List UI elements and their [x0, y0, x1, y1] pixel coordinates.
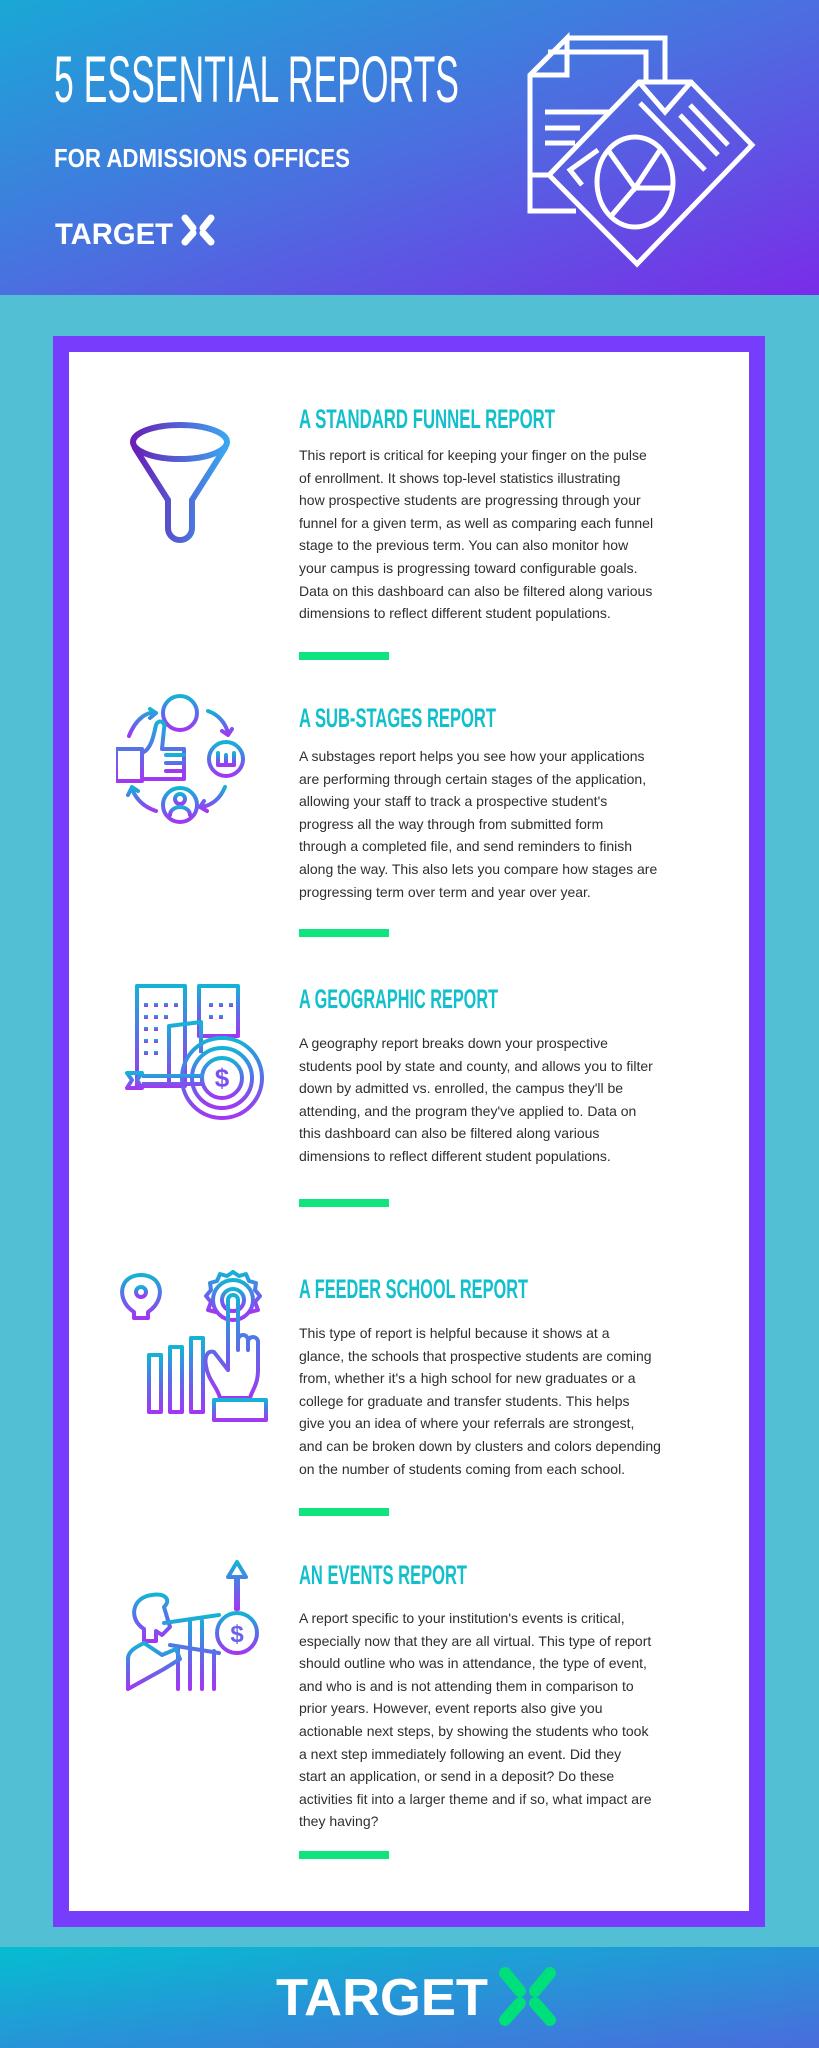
icon: reports documents [528, 32, 756, 268]
icon: bulb, chart, gear and hand [120, 1270, 268, 1422]
text: events: and who is and is not attending them in comparison to [299, 1678, 634, 1694]
text: funnel [299, 447, 653, 621]
text: sub-stages: are performing through certain stages of the application, [299, 771, 646, 787]
text: events: start an application, or send in a deposit? Do these [299, 1768, 614, 1784]
text: feeder school: from, whether it's a high school for new graduates or a [299, 1370, 636, 1386]
icon: buildings and target: $ [215, 1063, 230, 1093]
text: sub-stages: along the way. This also lets you compare how stages are [299, 861, 657, 877]
icon: funnel [130, 422, 230, 543]
text: geographic: down by admitted vs. enrolled, the campus they'll be [299, 1080, 623, 1096]
text: sub-stages: A substages report helps you see how your applications [299, 748, 645, 764]
text: feeder school: give you an idea of where your referrals are strongest, [299, 1415, 634, 1431]
text: feeder school: glance, the schools that prospective students are coming [299, 1348, 652, 1364]
text: funnel: dimensions to reflect different student populations. [299, 605, 611, 621]
text: geographic: students pool by state and county, and allows you to filter [299, 1058, 653, 1074]
text: feeder school: on the number of students coming from each school. [299, 1461, 625, 1477]
text: sub-stages [299, 748, 657, 900]
icon: person with megaphone [126, 1560, 259, 1692]
text: sub-stages: progressing term over term and year over year. [299, 884, 591, 900]
text: sub-stages: allowing your staff to track a prospective student's [299, 793, 607, 809]
text: feeder school: college for graduate and transfer students. This helps [299, 1393, 630, 1409]
section 3: geographic [124, 984, 498, 1120]
section 4: feeder school [120, 1270, 528, 1422]
text: geographic: dimensions to reflect different student populations. [299, 1148, 611, 1164]
text: geographic: this dashboard can also be filtered along various [299, 1125, 599, 1141]
title: 5 ESSENTIAL REPORTS [54, 42, 459, 116]
title [54, 42, 459, 251]
logo: TargetX: TARGET [276, 1969, 488, 2027]
text: events: a next step immediately following an event. Did they [299, 1746, 621, 1762]
text: sub-stages: progress all the way through from submitted form [299, 816, 603, 832]
text: events: prior years. However, event reports also give you [299, 1700, 602, 1716]
text: events: activities fit into a larger theme and if so, what impact are [299, 1791, 652, 1807]
text: geographic [299, 1035, 653, 1164]
text: geographic: A geography report breaks down your prospective [299, 1035, 608, 1051]
section 2: sub-stages [116, 694, 496, 824]
text: funnel: stage to the previous term. You can also monitor how [299, 537, 628, 553]
text: funnel: of enrollment. It shows top-level statistics illustrating [299, 470, 620, 486]
header banner [0, 0, 819, 295]
text: events: they having? [299, 1813, 378, 1829]
text: funnel: Data on this dashboard can also be filtered along various [299, 583, 652, 599]
text: events: should outline who was in attendance, the type of event, [299, 1655, 647, 1671]
text: sub-stages: through a completed file, and send reminders to finish [299, 838, 632, 854]
text: events: especially now that they are all virtual. This type of report [299, 1633, 651, 1649]
text: events [299, 1610, 652, 1829]
footer with logo [0, 1947, 819, 2048]
text: funnel: funnel for a given term, as well as comparing each funnel [299, 515, 653, 531]
text: feeder school: and can be broken down by clusters and colors depending [299, 1438, 661, 1454]
main panel [53, 336, 765, 1927]
section 5: events [126, 1560, 467, 1692]
section 1: funnel report [130, 405, 555, 543]
icon: buildings and target [124, 984, 264, 1120]
text: events: A report specific to your institution's events is critical, [299, 1610, 625, 1626]
text: funnel: how prospective students are progressing through your [299, 492, 641, 508]
text: feeder school [299, 1325, 661, 1477]
text: funnel: your campus is progressing toward configurable goals. [299, 560, 638, 576]
icon: sub-stages cycle [116, 694, 245, 824]
text: geographic: attending, and the program they've applied to. Data on [299, 1103, 636, 1119]
title: FOR ADMISSIONS OFFICES [54, 143, 350, 173]
icon: person with megaphone: $ [230, 1621, 244, 1648]
text: events: actionable next steps, by showing the students who took [299, 1723, 648, 1739]
text: funnel: This report is critical for keeping your finger on the pulse [299, 447, 647, 463]
title: TARGET [55, 218, 173, 251]
text: feeder school: This type of report is helpful because it shows at a [299, 1325, 610, 1341]
